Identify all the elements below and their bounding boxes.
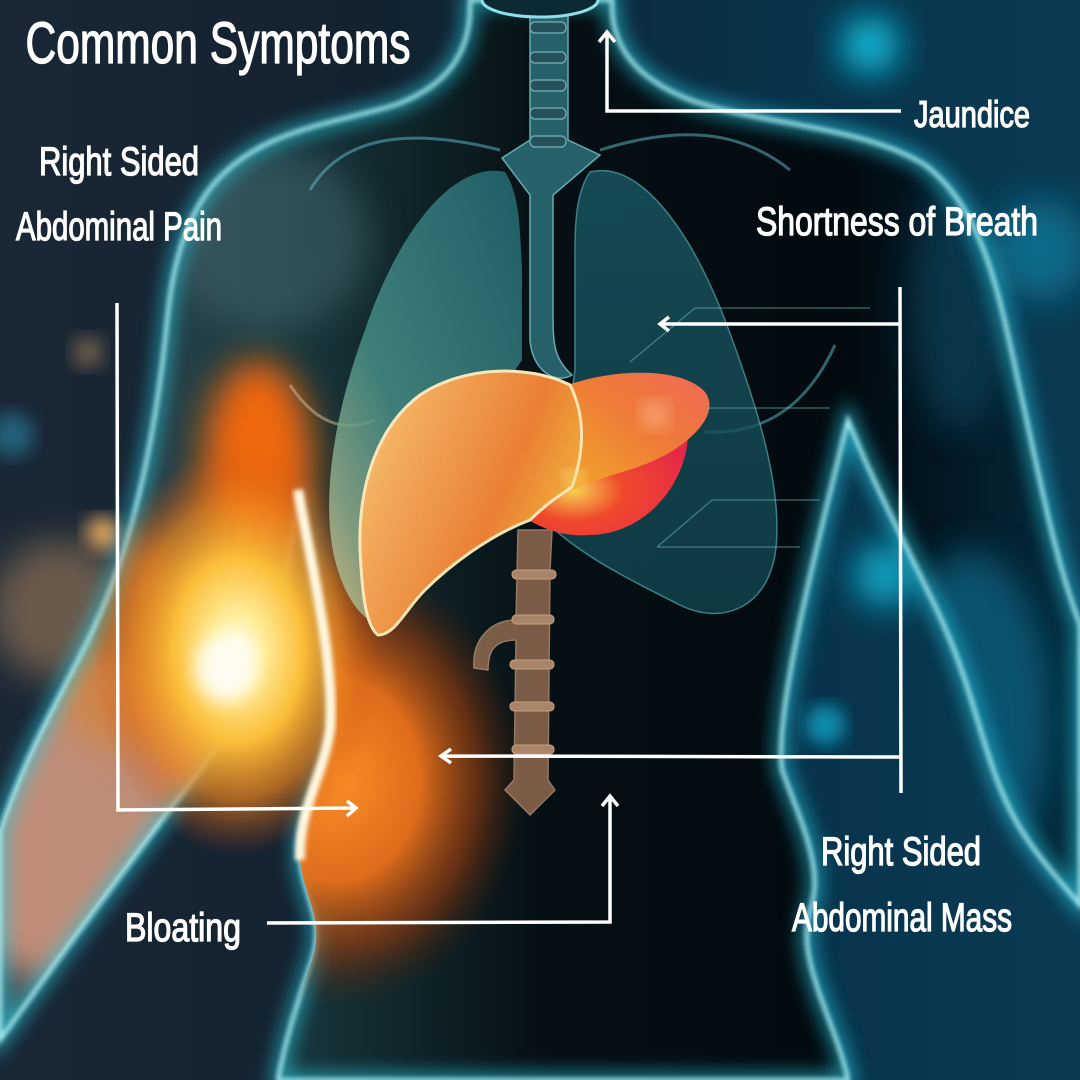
label: Right Sided Abdominal Pain: Right Sided: [39, 140, 199, 184]
label: Right Sided Abdominal Mass: Abdominal Mass: [792, 896, 1012, 940]
liver right lobe: [568, 373, 709, 490]
arrow: Jaundice: [599, 32, 901, 111]
belly glow clipped to torso: [300, 572, 517, 997]
title: Common Symptoms: [26, 11, 410, 76]
liver underside: [525, 436, 688, 535]
arrow: Bloating: [267, 796, 618, 923]
pain glow: [93, 360, 525, 1005]
lungs: [329, 171, 777, 625]
arrow: Right Sided Abdominal Pain: [117, 303, 356, 816]
liver: [360, 371, 709, 635]
label: Jaundice: Jaundice: [914, 94, 1030, 135]
chest contour lines: [290, 135, 835, 432]
bracket with arrows: Shortness of Breath and Abdominal Mass: [441, 287, 901, 793]
liver left lobe: [360, 371, 582, 635]
label: Right Sided Abdominal Mass: Right Sided: [821, 830, 981, 874]
thin diagnostic lines: [630, 308, 870, 547]
lower spine: [474, 530, 556, 815]
label: Bloating: Bloating: [125, 906, 241, 950]
trachea and spine: [482, 0, 600, 378]
label: Right Sided Abdominal Pain: Abdominal Pain: [16, 205, 222, 249]
